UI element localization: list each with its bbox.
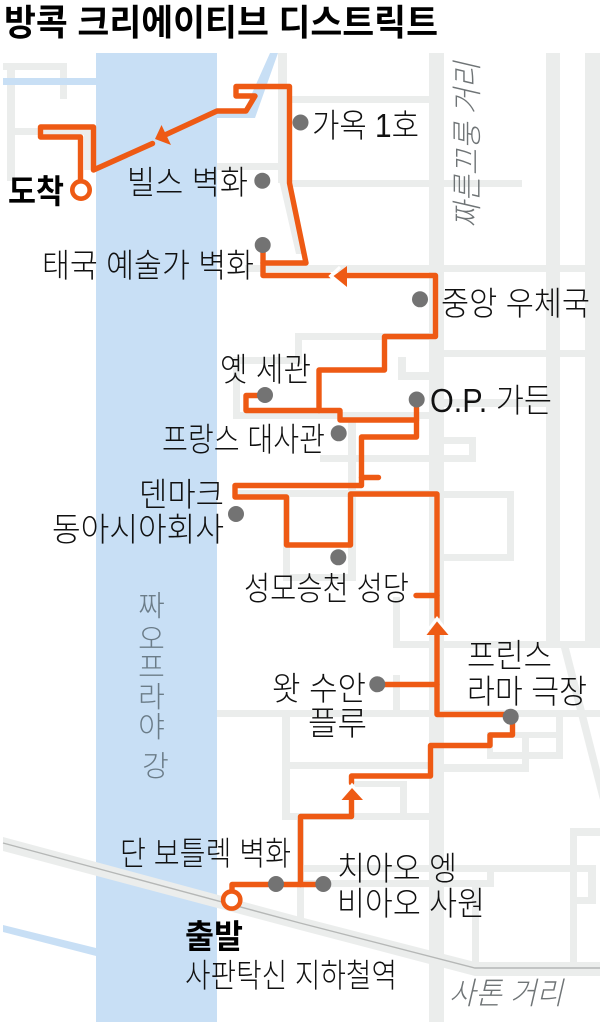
river: canal branches [3,53,278,956]
route: up to post office and third arrow [319,276,436,410]
label: central post office: 중앙 우체국 [441,285,590,322]
label: Denmark East Asiatic company [52,476,224,548]
route: branch to Wat Suan Plu [378,682,437,687]
label: Denmark East Asiatic company: 동아시아회사 [52,511,224,548]
label: start: 출발 [185,918,243,955]
road behind the arrow corner [278,53,287,183]
river label: Chao Phraya: 오 [138,624,165,656]
arrow: up, south section [342,785,363,800]
arrow: left, post office [330,266,347,287]
route: third arrow to Thai art mural [263,246,330,276]
label: Saphan Taksin station: 사판탁신 지하철역 [185,957,397,994]
label: Prince Rama theatre: 라마 극장 [467,673,587,710]
route: branch to old customs house [246,396,416,420]
label: Chiao Eng Biao shrine [337,850,485,922]
start marker [223,891,240,909]
label: Thai art mural: 태국 예술가 벽화 [42,247,254,284]
river label: Chao Phraya: 짜 [138,591,165,623]
route: branch to Assumption Cathedral [416,593,437,598]
rail line: Sathorn road with BTS track [3,837,600,976]
finish marker [72,181,90,199]
route: start to shrine [232,884,323,893]
river label: Chao Phraya: 야 [138,712,165,744]
route: first arrow to Prince Rama theatre [352,717,512,783]
route: mural to Gaok House and fourth arrow [165,86,306,263]
label: Wat Suan Plu: 왓 수안 [272,670,366,707]
route: short branch [362,475,378,480]
route: second arrow to Denmark company [235,400,437,617]
river label: Chao Phraya: 강 [142,751,169,783]
route: start to first arrow [300,797,352,884]
river: Chao Phraya main channel [96,53,217,1022]
label: finish: 도착 [8,173,64,210]
label: Assumption Cathedral: 성모승천 성당 [244,570,409,607]
street label: Charoen Krung road: 짜른끄룽 거리 [450,60,485,228]
arrow: toward finish [155,125,171,145]
route: Prince Rama theatre to second arrow [437,633,511,714]
river label: Chao Phraya: 프 [138,652,165,684]
label: Chiao Eng Biao shrine: 치아오 엥 [337,850,457,887]
river label: Chao Phraya: 라 [138,682,165,714]
label: old customs house: 옛 세관 [220,351,311,388]
route: fourth arrow to finish [40,127,152,182]
label: Wat Suan Plu: 플루 [308,705,367,742]
label: Prince Rama theatre: 프린스 [467,637,552,674]
label: Dan Bo Tle Lek mural: 단 보틀렉 벽화 [120,835,291,872]
label: French embassy: 프랑스 대사관 [162,421,325,458]
label: Chiao Eng Biao shrine: 비아오 사원 [337,885,485,922]
label: Bills mural: 빌스 벽화 [127,164,248,201]
label: Gaok House: 가옥 1호 [312,107,419,144]
label: O.P. Garden: O.P. 가든 [430,382,552,419]
label: Prince Rama theatre [467,637,587,710]
label: Wat Suan Plu [272,670,367,742]
label: Denmark East Asiatic company: 덴마크 [139,476,224,513]
street label: Sathorn road: 사톤 거리 [449,976,565,1011]
arrow: up, middle section [426,618,448,635]
walking route [40,86,512,893]
title: 방콕 크리에이티브 디스트릭트 [4,2,438,43]
stop dots [228,114,519,892]
